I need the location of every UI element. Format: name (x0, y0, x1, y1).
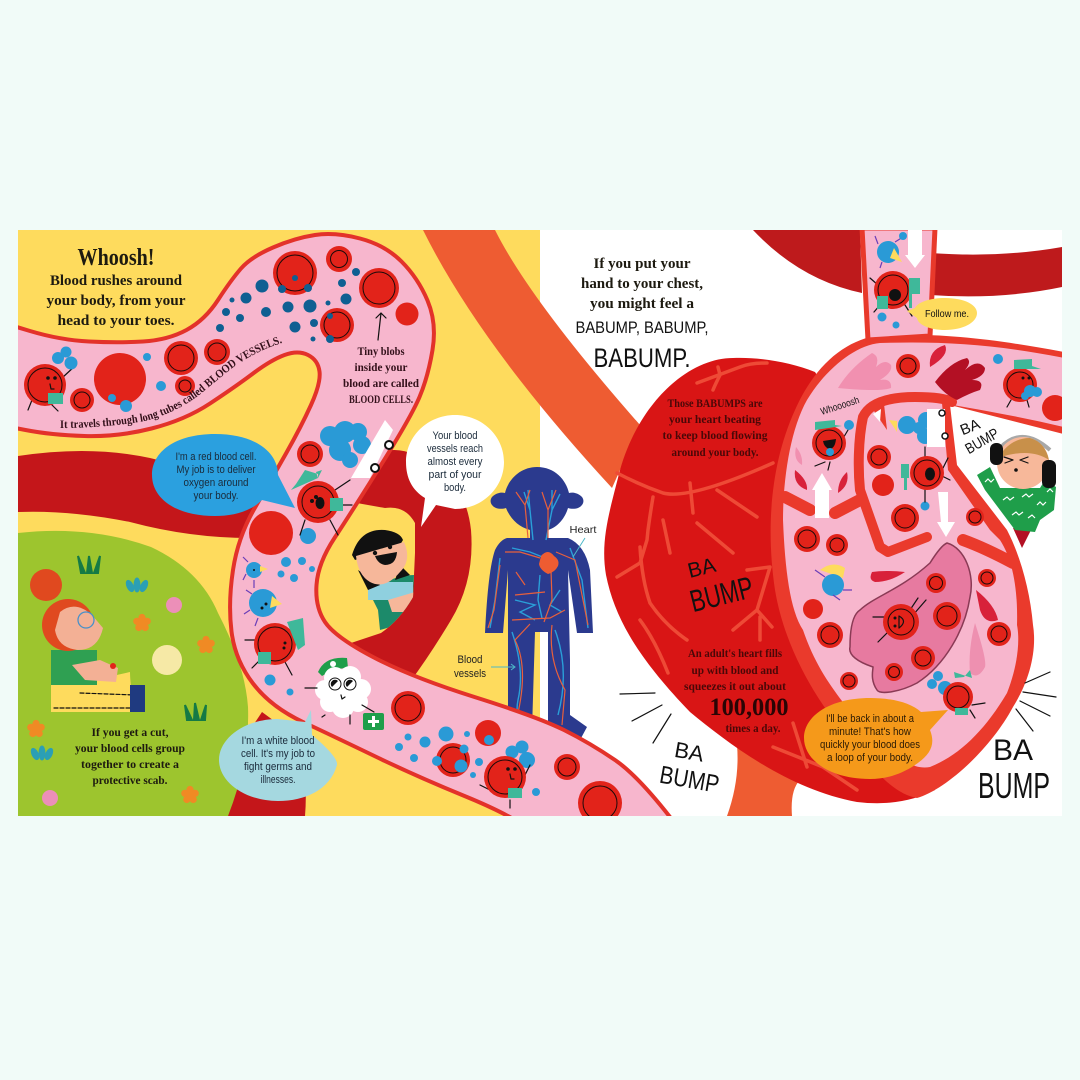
bubble: white blood cell: fight germs and (244, 761, 312, 773)
label: heart: Heart (570, 524, 597, 536)
orange stem below heart (727, 745, 800, 816)
bubble: blood vessels reach (406, 415, 504, 527)
woman with cut finger (30, 569, 145, 712)
bubble: white blood cell (219, 710, 337, 801)
text: protective scab: your blood cells group (75, 743, 185, 755)
figure red vessels (488, 490, 588, 725)
green lawn panel (18, 531, 248, 816)
text: heart facts: squeezes it out about (684, 681, 786, 693)
dark blue blood dots (216, 268, 360, 343)
heading: whoosh: your body, from your (46, 293, 186, 309)
character: red cell with hat (291, 470, 352, 535)
bubble: blood vessels reach: vessels reach (427, 443, 483, 455)
text: heart beating: around your body. (672, 447, 759, 459)
red cells in heart (794, 312, 1068, 690)
inner heart wall (859, 397, 952, 552)
bubble: follow me: Follow me. (925, 309, 969, 320)
heading: whoosh: Whoosh! (78, 245, 154, 271)
text: blood cells: Tiny blobs (358, 346, 405, 358)
boy scrunched face (1004, 457, 1028, 463)
character: red cell guide (870, 271, 920, 316)
bubble: blood vessels reach: part of your (428, 469, 482, 481)
text: blood cells: inside your (354, 362, 408, 374)
boy headphones band (1000, 437, 1050, 450)
ba bump on heart: BUMP (686, 570, 757, 619)
woman glasses (78, 612, 94, 628)
bubble: red blood cell (152, 434, 295, 516)
bubble: white blood cell: illnesses. (260, 774, 296, 786)
light blue blood dots (108, 353, 540, 796)
bubble: follow me (907, 298, 977, 330)
dark red lower vessel (228, 712, 306, 816)
whooosh label: Whoooosh (819, 395, 861, 418)
white flow arrows (812, 230, 955, 537)
dark red vessel left (18, 451, 260, 538)
text: put your hand to your chest: If you put your (594, 256, 691, 272)
grass and flower decorations (27, 556, 215, 806)
woman shirt (51, 650, 97, 685)
character: red cell running back (927, 670, 985, 718)
petal shapes in heart (795, 345, 998, 675)
dark red vessel top right (753, 230, 1062, 296)
text: heart beating: to keep blood flowing (662, 430, 768, 442)
character: red cell in chamber (873, 598, 926, 642)
label: blood vessels: Blood (458, 654, 482, 666)
text: put your hand to your chest (576, 256, 708, 373)
bubble: blood vessels reach: almost every (428, 456, 483, 468)
ba bump upper right: BUMP (962, 425, 1002, 458)
character: white blood cell nurse (305, 658, 384, 730)
ba bump upper right: BA (958, 416, 983, 439)
yellow window with girl (318, 503, 415, 643)
girl face (356, 542, 407, 584)
curved text: blood vessels: It travels through long tubes called BLOOD VESSELS. (60, 337, 282, 428)
character: platelet on stretcher (320, 420, 393, 478)
cut mark (110, 663, 116, 669)
character: red cell with oxygen (24, 346, 78, 411)
heart inner chamber (850, 543, 971, 692)
text: protective scab: together to create a (81, 759, 179, 771)
text: protective scab: protective scab. (92, 775, 168, 787)
heading: whoosh: head to your toes. (58, 313, 175, 329)
woman arm (72, 660, 118, 682)
right page white background (540, 230, 1062, 816)
label: blood vessels: vessels (454, 668, 486, 680)
ba bump tick marks left (620, 693, 671, 743)
ba bump tick marks right (1016, 672, 1056, 731)
bubble: white blood cell: cell. It's my job to (241, 748, 315, 760)
bubble: red blood cell: your body. (194, 490, 238, 502)
ba bump left: BA (673, 737, 706, 767)
bubble: white blood cell: I'm a white blood (242, 735, 314, 747)
heart surface veins (617, 363, 857, 790)
boy shirt (977, 467, 1056, 532)
girl body (373, 575, 414, 630)
ba bump on heart: BA (685, 554, 718, 583)
text: blood cells: blood are called (343, 378, 420, 390)
girl eyes (373, 545, 392, 555)
bubble: back in a minute: I'll be back in about a (826, 713, 915, 725)
ba bump upper right (958, 416, 1002, 458)
ba bump right: BUMP (978, 765, 1050, 806)
heart pink interior (783, 343, 1075, 768)
boy hair (998, 438, 1049, 460)
woman yellow legs (51, 685, 130, 712)
figure heart (539, 552, 558, 574)
heading: whoosh: Blood rushes around (50, 273, 183, 289)
girl sleeve (368, 582, 413, 600)
character: platelet with stretcher in heart (889, 409, 948, 447)
character: blue cell with yellow wing (815, 564, 852, 600)
upper vertical vessel (862, 228, 935, 340)
heart cross-section wall (771, 335, 1075, 798)
text: heart facts (684, 648, 788, 735)
boy maroon trousers (1013, 528, 1032, 548)
character: red cell with oxygen lower (480, 740, 535, 808)
heading: whoosh (46, 245, 186, 329)
navy body figure with vessels (485, 467, 593, 740)
character: blue germ (244, 589, 282, 626)
bubble: blood vessels reach: body. (444, 482, 466, 494)
pink blood vessel tube (0, 234, 680, 830)
heart main body (604, 358, 935, 803)
text: put your hand to your chest: hand to your chest, (581, 276, 703, 292)
text: heart beating: your heart beating (669, 414, 761, 426)
ba bump left: BUMP (657, 761, 721, 799)
character: blue germ in upper vessel (875, 232, 907, 268)
bubble: back in a minute: minute! That's how (829, 726, 911, 738)
text: put your hand to your chest: BABUMP. (594, 343, 690, 373)
red blood cells in tube (70, 246, 622, 825)
artwork pages (18, 230, 1062, 816)
ba bump on heart (681, 546, 757, 619)
text: put your hand to your chest: BABUMP, BABUMP, (576, 318, 708, 337)
text: heart facts: times a day. (726, 723, 781, 735)
dark red loop behind tube (352, 450, 472, 674)
bubble: red blood cell: My job is to deliver (176, 464, 256, 476)
text: blood cells: BLOOD CELLS. (349, 394, 413, 406)
ba bump left (657, 735, 726, 799)
label arrows (491, 538, 585, 670)
tiny blobs arrow (376, 313, 386, 340)
figure blue vessels (490, 490, 588, 722)
boy with headphones (977, 437, 1056, 548)
heart wall stubs (785, 497, 1013, 563)
woman hair (42, 599, 94, 651)
left page yellow background (18, 230, 540, 816)
character: red cell with cap right (1003, 359, 1042, 407)
woman hair bun (30, 569, 62, 601)
text: heart facts: up with blood and (692, 665, 779, 677)
girl arm (388, 592, 415, 612)
figure silhouette (485, 467, 593, 740)
bubble: blood vessels reach: Your blood (432, 430, 478, 442)
bubble: red blood cell: I'm a red blood cell. (176, 451, 256, 463)
text: heart facts: 100,000 (710, 694, 788, 721)
bubble: back in a minute: quickly your blood does (820, 739, 920, 751)
ba bump right (978, 734, 1050, 806)
girl hair (352, 530, 410, 590)
text: heart facts: An adult's heart fills (688, 648, 782, 660)
text: protective scab: If you get a cut, (92, 727, 169, 739)
text: put your hand to your chest: you might feel a (590, 296, 695, 312)
boy face (997, 437, 1049, 489)
character: red cell in chamber top (901, 447, 950, 502)
infographic spread (18, 230, 1062, 816)
orange artery band (423, 230, 640, 488)
small notch in inner wall (872, 404, 887, 430)
ba bump right: BA (993, 734, 1033, 767)
white notch triangle (873, 409, 881, 422)
character: small blue germ (243, 557, 268, 588)
text: heart beating: Those BABUMPS are (668, 398, 762, 410)
woman shoe (130, 685, 145, 712)
bubble: red blood cell: oxygen around (184, 477, 248, 489)
boy shirt pattern (985, 479, 1053, 518)
bubble: back in a minute: a loop of your body. (827, 752, 913, 764)
boy ear cups (990, 443, 1056, 488)
character: red cell with bag (245, 618, 305, 675)
character: laughing red cell (812, 420, 854, 470)
bubble: back in a minute (804, 698, 948, 779)
girl mouth (375, 552, 397, 565)
woman face (55, 607, 103, 650)
